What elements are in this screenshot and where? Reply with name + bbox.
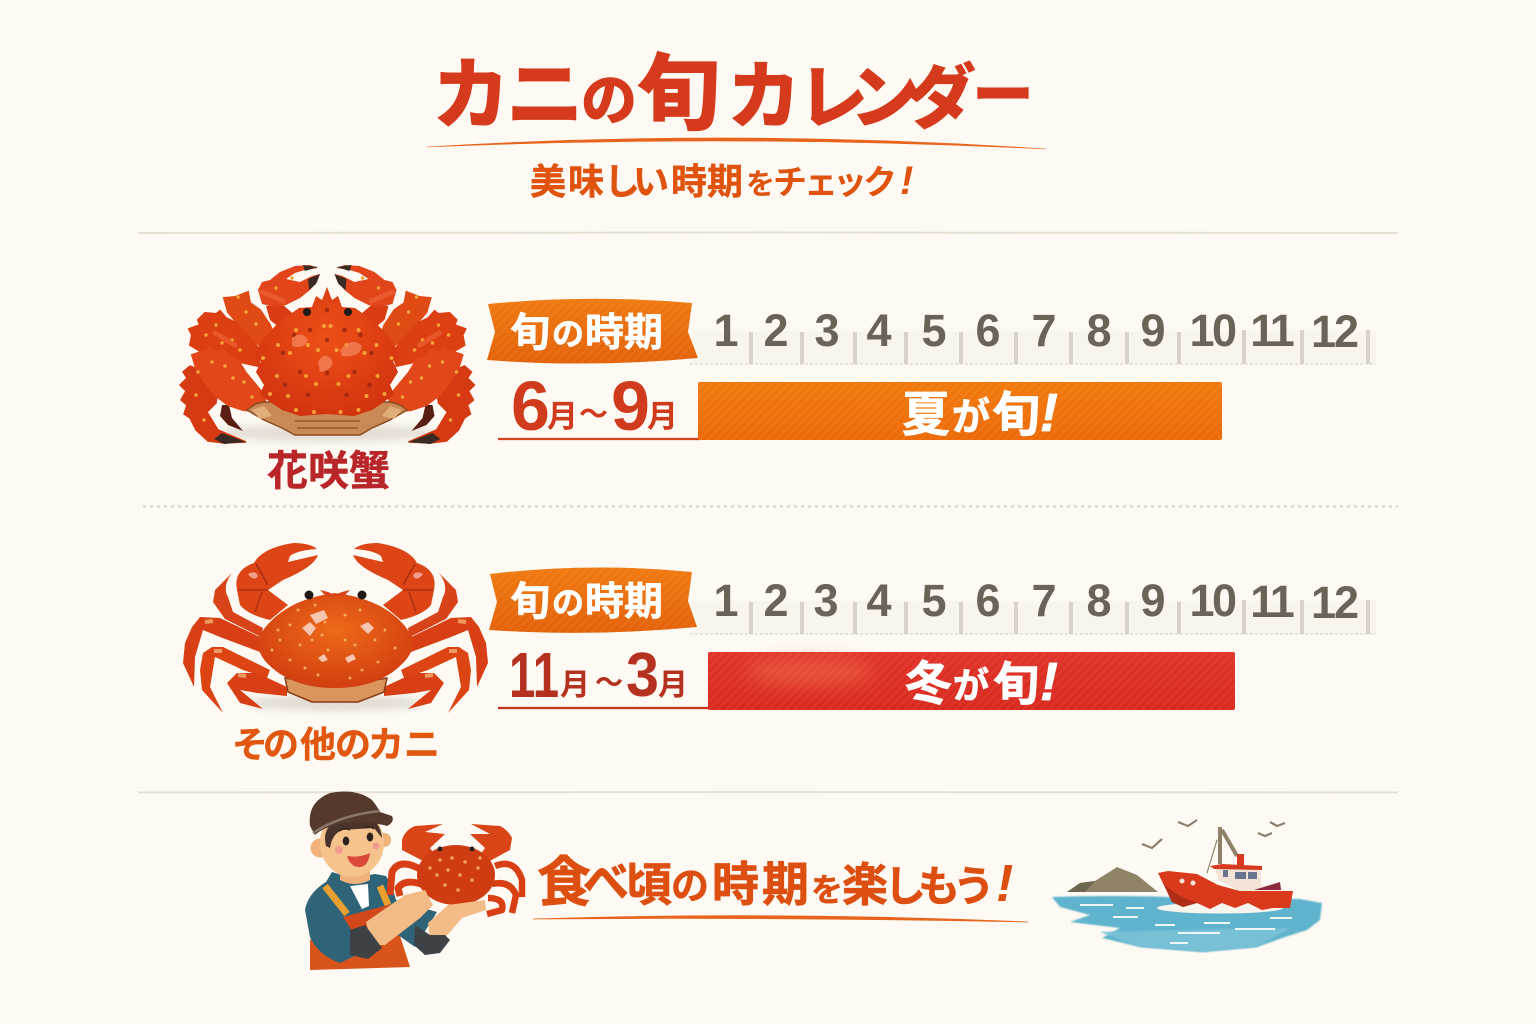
mast	[1220, 827, 1237, 864]
season bar: summer: 夏	[902, 375, 950, 445]
season bar: summer	[698, 375, 1222, 445]
season bar: winter: が	[953, 657, 989, 709]
season range: 11月~3月	[498, 639, 710, 711]
icon: snow crab	[183, 543, 488, 713]
wave foam	[1157, 902, 1283, 914]
month numbers	[713, 305, 1358, 357]
season range: 11月~3月: 3	[626, 641, 659, 710]
month numbers: 10	[1189, 305, 1236, 356]
month numbers: 7	[1031, 305, 1057, 356]
season range: 6月~9月: 月	[547, 391, 578, 436]
title: レンダ	[798, 42, 976, 143]
month numbers: 12	[1311, 306, 1358, 357]
month numbers: 6	[975, 575, 1001, 626]
cabin	[1215, 868, 1262, 891]
label: hanasaki crab name: 花咲蟹	[267, 437, 390, 497]
month numbers: 11	[1250, 576, 1294, 627]
neck and face	[310, 809, 391, 884]
apron straps	[325, 886, 388, 914]
footer message	[537, 838, 1013, 917]
month numbers: 9	[1140, 305, 1166, 356]
subtitle: 美味しい時期	[530, 153, 743, 205]
season bar: summer: が	[952, 386, 990, 441]
title: の	[581, 56, 637, 137]
footer message: を	[811, 865, 843, 911]
footer message: 頃	[626, 849, 672, 915]
section: hanasaki crab	[180, 265, 1376, 497]
season range: 11月~3月: 月	[560, 660, 590, 704]
footer underline swoosh	[533, 916, 1028, 922]
illustration: fisherman holding crab	[305, 792, 522, 970]
subtitle: を	[746, 161, 775, 203]
ribbon: 旬の時期: の	[552, 578, 584, 624]
ribbon: 旬の時期: 旬	[510, 300, 550, 358]
month numbers: 5	[921, 575, 947, 626]
title: 旬	[636, 27, 720, 148]
month numbers: 5	[921, 305, 947, 356]
season bar: winter	[708, 645, 1235, 714]
month numbers: 8	[1086, 305, 1112, 356]
season range: 6月~9月: ～	[579, 391, 608, 433]
shirt	[350, 884, 369, 909]
month numbers: 1	[713, 305, 739, 356]
month numbers	[713, 575, 1358, 628]
jacket	[305, 872, 437, 963]
season range: 11月~3月: 11	[509, 639, 559, 711]
ribbon: 旬の時期: 時期	[585, 302, 663, 358]
ribbon: 旬の時期	[489, 567, 697, 633]
label: other crabs name: その他のカニ	[232, 716, 440, 768]
gulls	[1142, 820, 1285, 848]
season bar: summer: !	[1040, 383, 1058, 443]
island	[1067, 867, 1158, 892]
cap	[310, 792, 393, 835]
footer message: 時期	[712, 846, 809, 915]
footer message: の	[671, 855, 709, 910]
dotted divider	[143, 506, 1398, 508]
ribbon: 旬の時期	[487, 299, 698, 364]
season bar: winter: 冬	[905, 645, 952, 714]
month scale strip	[690, 330, 1376, 364]
ribbon: 旬の時期: 時期	[585, 571, 663, 627]
season bar: winter: !	[1040, 652, 1058, 712]
month numbers: 4	[866, 575, 892, 626]
subtitle	[530, 153, 913, 205]
apron bottom	[310, 905, 410, 970]
top divider	[138, 232, 1398, 234]
season range: 6月~9月	[498, 367, 700, 445]
month numbers: 1	[713, 575, 739, 626]
season range: 11月~3月: 月	[658, 660, 688, 704]
season range: 6月~9月: 9	[611, 367, 650, 445]
title underline swoosh	[427, 138, 1046, 149]
section: other crabs	[183, 543, 1376, 768]
ribbon: 旬の時期: の	[552, 309, 584, 355]
subtitle: チェック	[773, 155, 897, 204]
month numbers: 8	[1086, 575, 1112, 626]
month numbers: 7	[1031, 575, 1057, 626]
season range: 11月~3月: ～	[595, 661, 623, 701]
month numbers: 2	[763, 305, 789, 356]
footer message: べ	[583, 846, 629, 912]
footer message: しもう	[884, 853, 995, 914]
season range: 6月~9月: 月	[647, 391, 678, 436]
month numbers: 2	[763, 575, 789, 626]
illustration: fishing boat scene	[1052, 820, 1322, 952]
title: カニ	[432, 33, 584, 145]
month numbers: 10	[1189, 575, 1236, 626]
footer message: !	[996, 855, 1013, 913]
month scale strip	[690, 600, 1376, 634]
hull	[1158, 871, 1293, 910]
season range: 6月~9月: 6	[511, 367, 550, 445]
month numbers: 11	[1250, 305, 1294, 356]
subtitle: !	[900, 159, 913, 203]
month numbers: 3	[814, 305, 840, 356]
sea	[1052, 896, 1322, 952]
title: カ	[727, 37, 801, 144]
title: ー	[972, 45, 1034, 135]
month numbers: 12	[1311, 577, 1358, 628]
title	[432, 27, 1034, 148]
bottom divider	[138, 791, 1398, 794]
arms and hands	[350, 890, 486, 959]
month numbers: 3	[813, 575, 839, 626]
month numbers: 9	[1140, 575, 1166, 626]
month numbers: 4	[866, 305, 892, 356]
footer message: 食	[537, 838, 591, 917]
month numbers: 6	[975, 305, 1001, 356]
apron bib	[343, 904, 398, 946]
ribbon: 旬の時期: 旬	[510, 569, 550, 627]
footer message: 楽	[842, 849, 888, 915]
season bar: winter: 旬	[993, 648, 1039, 714]
icon: hanasaki crab	[180, 265, 474, 444]
small crab	[390, 824, 522, 914]
season bar: summer: 旬	[992, 375, 1040, 445]
